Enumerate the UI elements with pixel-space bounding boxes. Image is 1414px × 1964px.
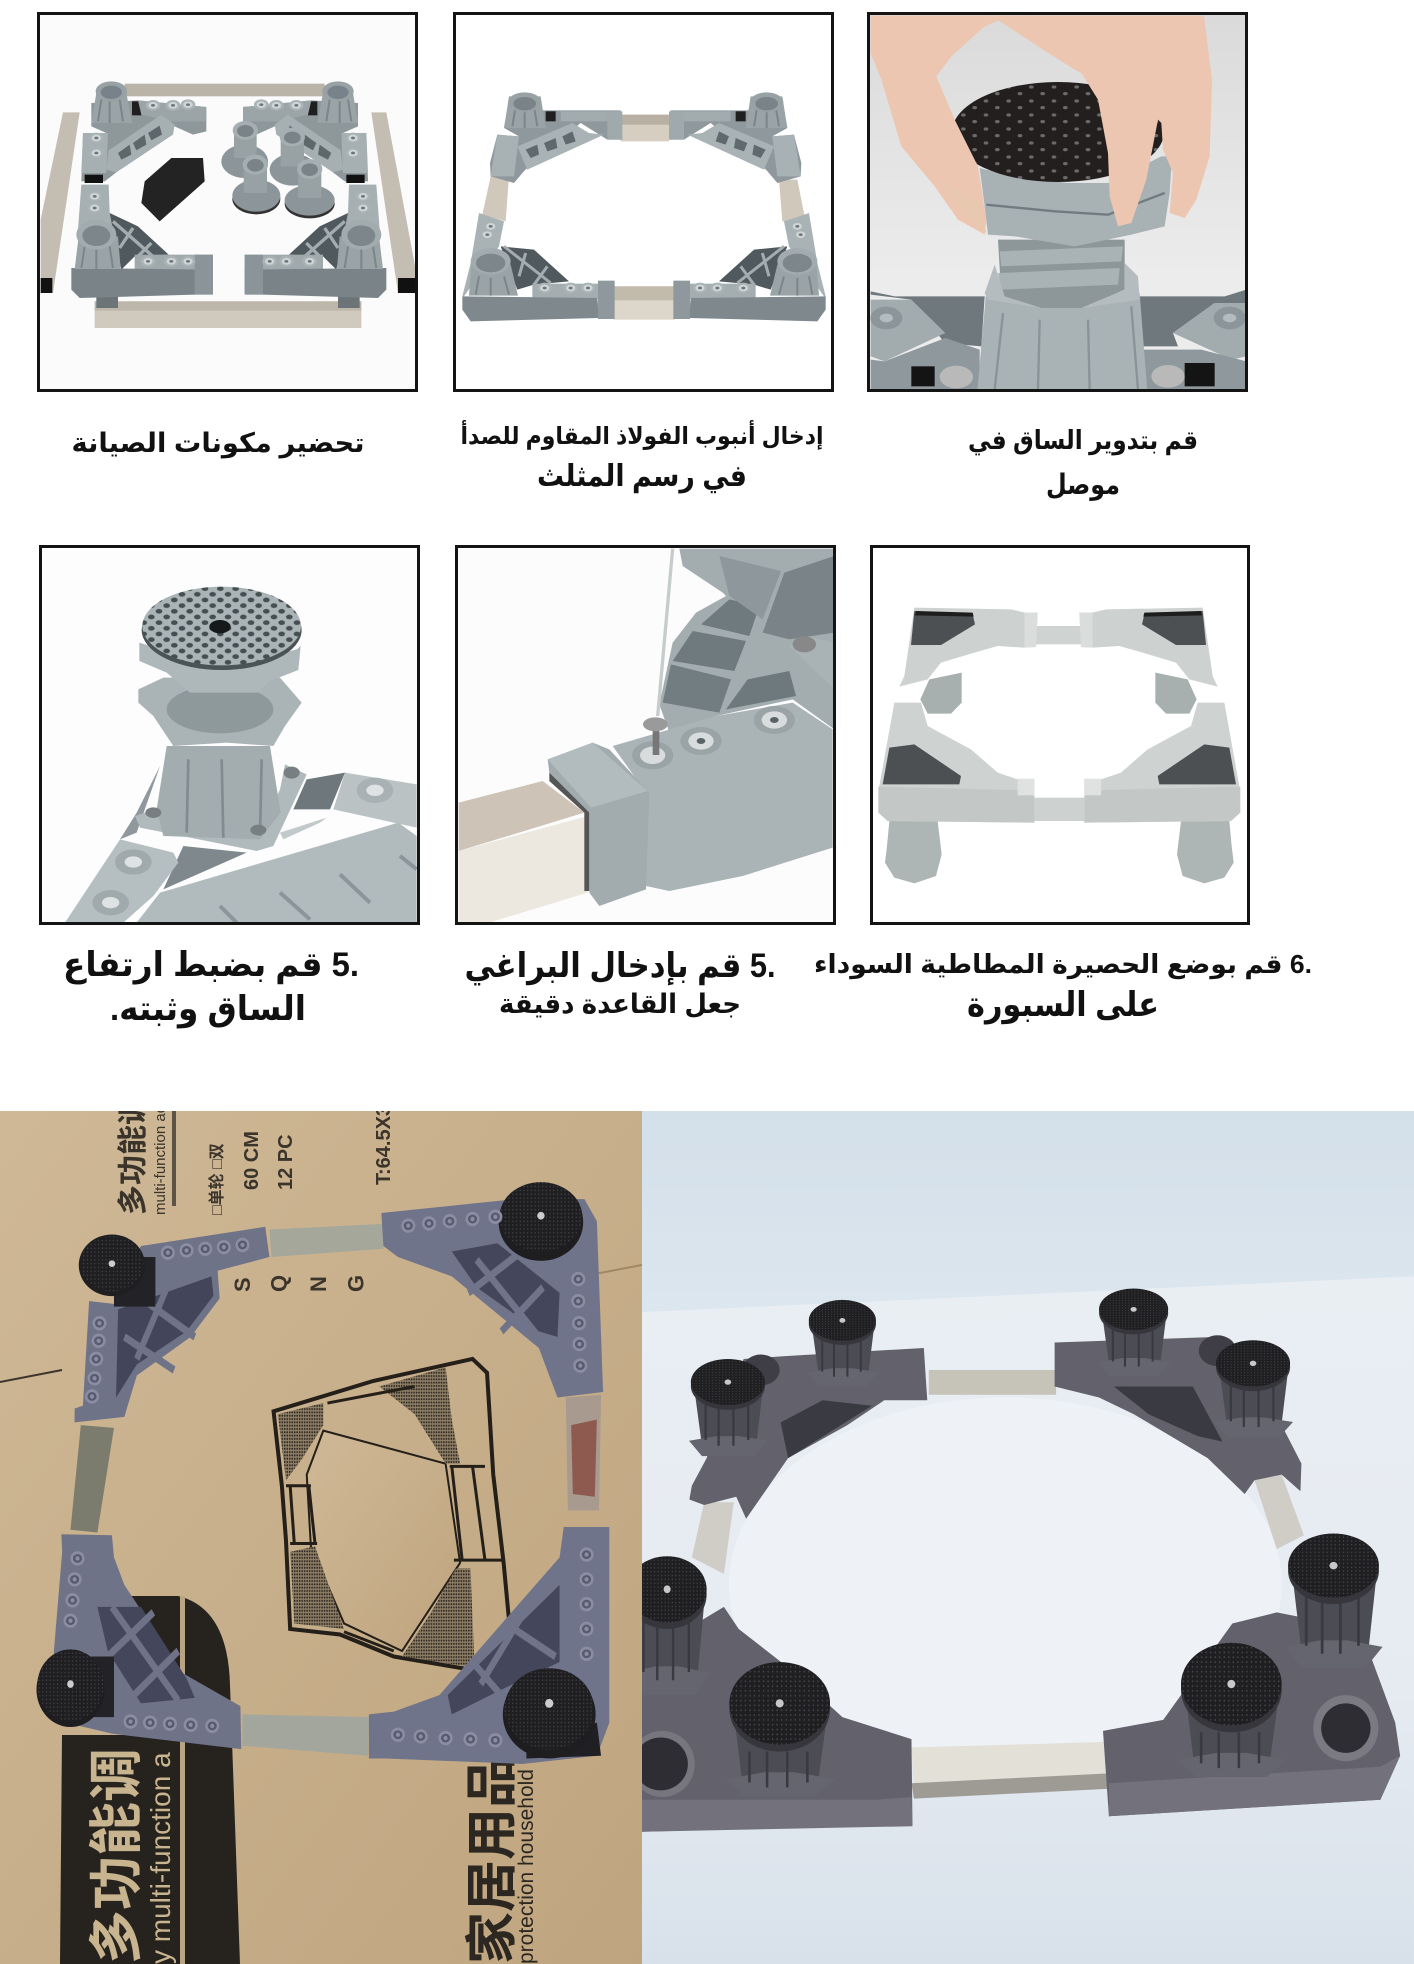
corner top right (381, 1199, 603, 1398)
caption: step 2: إدخال أنبوب الفولاذ المقاوم للصدأ (460, 420, 824, 450)
corner bottom left (54, 1534, 241, 1749)
cardboard seams (0, 1370, 62, 1382)
cardboard printed text (117, 1065, 395, 1292)
panel 6 border (872, 546, 1248, 924)
cardboard printed text: 多功能调整 (117, 1065, 150, 1215)
leg body (977, 290, 1147, 391)
lower collar (138, 678, 302, 746)
screw and wire (656, 549, 674, 716)
bottom printed text: protection household ite (515, 1741, 538, 1964)
loose leg three (232, 155, 280, 214)
corners (490, 92, 622, 183)
bracket upper right (333, 773, 417, 828)
cardboard printed text: multi-function adjus (152, 1086, 169, 1215)
panel: step 2 insert tube (462, 92, 826, 322)
caption: step 6 (814, 949, 1312, 1025)
ribbed brace (659, 549, 834, 733)
loose leg two (270, 128, 310, 186)
caption: step 2 (460, 420, 824, 494)
caption: step 4 (63, 946, 359, 1029)
panel 4 border (40, 546, 418, 924)
bracket lower (137, 823, 417, 923)
end cap (548, 743, 649, 906)
panel: step 6 rubber mats (878, 608, 1240, 884)
bracket left (871, 291, 985, 346)
black pad (952, 82, 1164, 182)
loose leg one (221, 121, 268, 178)
upper flange (139, 643, 301, 693)
caption: step 4: ⁦5.⁩ قم بضبط ارتفاع (63, 946, 359, 985)
frame corner top left (689, 1348, 927, 1519)
corner bottom right (369, 1527, 609, 1764)
bottom printed text: 多功能调 (87, 1748, 147, 1964)
frame corner bottom left (641, 1607, 912, 1832)
steel rails (125, 84, 325, 96)
leg body (157, 746, 281, 839)
mounting plate (135, 764, 307, 851)
panel: step 5 insert screws (456, 546, 835, 924)
pad (142, 624, 302, 670)
panel: step 3 rotate leg (868, 13, 1247, 391)
black card shape (60, 1596, 240, 1964)
panel: step 4 adjust leg height (66, 586, 417, 922)
table surface (640, 1276, 1414, 1964)
bottom printed text: 家居用品 (464, 1756, 522, 1964)
caption: step 6: على السبورة (967, 986, 1159, 1025)
rivets (632, 741, 673, 769)
bracket body (613, 703, 833, 891)
caption: step 4: الساق وثبته. (110, 990, 306, 1029)
thread (998, 240, 1125, 308)
panel 5 border (456, 546, 834, 924)
fingers (991, 16, 1212, 226)
frame corner bottom right (1103, 1612, 1400, 1816)
caption: step 5 (464, 947, 775, 1019)
steel rails (269, 1224, 383, 1257)
caption: step 5: ⁦5.⁩ قم بإدخال البراغي (464, 947, 775, 986)
cardboard printed text: SQNG (230, 1253, 369, 1292)
bottom printed text (87, 1741, 538, 1964)
fingernails (985, 228, 986, 233)
steel tube (459, 781, 584, 851)
plate screws (145, 807, 161, 818)
caption: step 3 (968, 425, 1198, 501)
panel: step 1 maintenance components (40, 81, 415, 328)
loose leg four (285, 159, 335, 218)
caption: step 2: في رسم المثلث (537, 460, 747, 494)
caption: step 3: قم بتدوير الساق في (968, 425, 1198, 456)
bracket right (1140, 290, 1246, 346)
inner table highlight (729, 1398, 1282, 1772)
frame corner top right (1055, 1337, 1301, 1494)
cardboard printed text: 60 CM (241, 1131, 263, 1190)
printed washing machine stand drawing (274, 1359, 510, 1670)
steel rails (929, 1370, 1056, 1395)
legs (689, 1359, 768, 1456)
steel rails (621, 115, 669, 141)
caption: step 6: ⁦6.⁩ قم بوضع الحصيرة المطاطية السوداء (814, 949, 1312, 980)
cardboard printed text: T:64.5X37 (373, 1094, 395, 1185)
panel 2 border (454, 14, 832, 390)
rubber mats (141, 158, 205, 221)
thumb (871, 16, 1010, 235)
caption: step 1: تحضير مكونات الصيانة (72, 428, 364, 459)
corner top left (75, 1227, 269, 1422)
cardboard printed text: □单轮 □双 (208, 1143, 226, 1215)
caption: step 3: موصل (1046, 469, 1120, 501)
corners (81, 81, 206, 183)
bracket lower left (65, 839, 178, 923)
photo: base frame on white table (626, 1111, 1414, 1964)
adjusting flange (980, 156, 1172, 246)
bottom printed text: y multi-function a (145, 1752, 176, 1964)
panel 1 border (38, 14, 416, 390)
photo: base frame on cardboard (0, 1065, 642, 1964)
cardboard printed text: 12 PC (275, 1134, 297, 1190)
caption: step 5: جعل القاعدة دقيقة (499, 989, 741, 1019)
panel 3 border (868, 14, 1246, 390)
